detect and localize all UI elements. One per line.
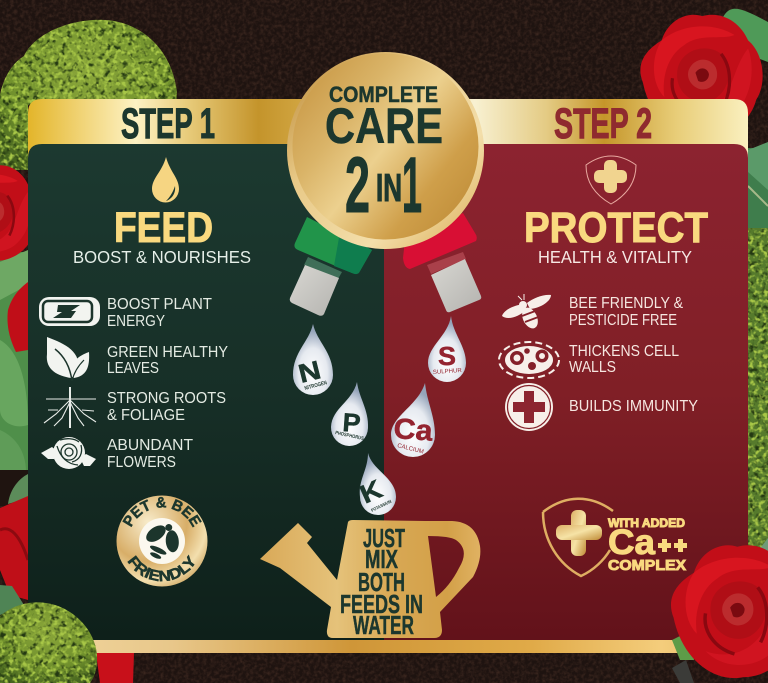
text: bee friendly and pesticide free: BEE FRIENDLY & xyxy=(569,295,684,312)
text: strong roots and foliage: & FOLIAGE xyxy=(107,407,185,424)
bottom-left topiary bush xyxy=(0,602,97,683)
drop: nitrogen xyxy=(293,324,333,395)
medal title: 2 in 1: 2 xyxy=(345,140,370,229)
drop: nitrogen: NITROGEN xyxy=(304,380,328,392)
drop: potassium xyxy=(355,453,396,515)
green bottle xyxy=(290,217,372,316)
icon: battery xyxy=(39,297,100,326)
text: abundant flowers: ABUNDANT xyxy=(107,437,194,454)
drop: phosphorus: PHOSPHORUS xyxy=(335,430,365,442)
text: boost plant energy xyxy=(107,296,213,330)
medal title: complete: COMPLETE xyxy=(329,82,438,107)
text: with added: WITH ADDED xyxy=(608,516,685,530)
gold header band xyxy=(28,99,748,160)
text: strong roots and foliage xyxy=(107,390,226,424)
text: thickens cell walls xyxy=(569,343,679,376)
heading: step 2: STEP 2 xyxy=(554,100,652,148)
badge text: pet and bee: PET & BEE xyxy=(122,496,202,528)
drop: calcium xyxy=(391,383,435,457)
left side foliage and roses xyxy=(0,165,28,615)
subheading: health and vitality: HEALTH & VITALITY xyxy=(538,247,692,267)
icon: feed droplet xyxy=(152,157,179,202)
watering can xyxy=(260,520,480,640)
can text: just mix both feeds in water: JUST xyxy=(363,523,405,553)
text: bee friendly and pesticide free xyxy=(569,295,684,329)
badge icon: bee xyxy=(136,516,188,566)
can text: just mix both feeds in water: FEEDS IN xyxy=(340,589,423,619)
badge: pet and bee friendly xyxy=(116,496,208,586)
can text: just mix both feeds in water xyxy=(340,523,423,640)
text: boost plant energy: BOOST PLANT xyxy=(107,296,213,313)
text: green healthy leaves: LEAVES xyxy=(107,360,159,377)
drop: phosphorus xyxy=(331,382,368,446)
icon: immunity cross xyxy=(505,383,553,431)
right side foliage xyxy=(748,142,768,548)
heading: feed: FEED xyxy=(114,204,213,252)
icon: protect shield xyxy=(586,156,636,204)
text: green healthy leaves xyxy=(107,344,228,377)
bottom-left red rose fragment xyxy=(96,653,134,683)
drop: sulphur xyxy=(428,316,466,382)
can text: just mix both feeds in water: MIX xyxy=(365,544,398,574)
panel: protect xyxy=(384,144,748,640)
text: boost plant energy: ENERGY xyxy=(107,313,165,330)
shield outline xyxy=(543,499,613,576)
icon: plus signs xyxy=(658,539,687,552)
medal: complete care 2 in 1: 1 xyxy=(402,140,422,229)
icon: leaves xyxy=(47,337,89,381)
subheading: boost and nourishes: BOOST & NOURISHES xyxy=(73,247,251,267)
bottom gold band xyxy=(28,638,748,653)
medal title: 2 in 1: IN xyxy=(376,167,402,210)
drop: calcium: Ca xyxy=(393,413,435,448)
text: strong roots and foliage: STRONG ROOTS xyxy=(107,390,226,407)
can text: just mix both feeds in water: BOTH xyxy=(358,567,405,597)
drop: phosphorus: P xyxy=(342,407,362,438)
heading: step 1: STEP 1 xyxy=(121,100,215,148)
text: builds immunity: BUILDS IMMUNITY xyxy=(569,398,698,415)
red bottle xyxy=(403,213,481,312)
drop: potassium: K xyxy=(355,473,387,509)
drop: calcium: CALCIUM xyxy=(397,443,424,455)
list: feed benefits xyxy=(39,296,228,471)
heading: protect: PROTECT xyxy=(524,204,708,252)
medal: complete care 2 in 1 xyxy=(287,52,484,249)
text: complex: COMPLEX xyxy=(608,557,686,574)
drop: nitrogen: N xyxy=(295,354,324,389)
icon: plant cell xyxy=(499,342,559,378)
drop: sulphur: S xyxy=(438,341,456,371)
text: abundant flowers xyxy=(107,437,194,471)
list: protect benefits xyxy=(499,294,698,431)
text: bee friendly and pesticide free: PESTICIDE FREE xyxy=(569,312,677,329)
text: abundant flowers: FLOWERS xyxy=(107,454,176,471)
text: Ca++: Ca xyxy=(608,523,656,562)
drop: potassium: POTASSIUM xyxy=(370,499,392,513)
text: thickens cell walls: THICKENS CELL xyxy=(569,343,679,360)
can text: just mix both feeds in water: WATER xyxy=(353,610,414,640)
drop: sulphur: SULPHUR xyxy=(433,368,463,376)
bottom-right rose with leaves xyxy=(671,538,768,683)
panel: feed xyxy=(28,144,384,640)
icon: roots xyxy=(44,387,96,428)
medal title: care: CARE xyxy=(325,98,443,154)
icon: rose flower xyxy=(41,437,96,469)
badge: with added Ca++ complex xyxy=(543,499,687,576)
top-left topiary bush xyxy=(0,20,177,170)
medal title: 2 in 1 xyxy=(345,140,422,229)
text: green healthy leaves: GREEN HEALTHY xyxy=(107,344,228,361)
badge text: friendly: FRIENDLY xyxy=(127,554,195,582)
gold cross xyxy=(556,510,602,556)
text: thickens cell walls: WALLS xyxy=(569,359,616,376)
top-right rose with leaf xyxy=(640,8,768,116)
icon: bee xyxy=(502,294,551,331)
